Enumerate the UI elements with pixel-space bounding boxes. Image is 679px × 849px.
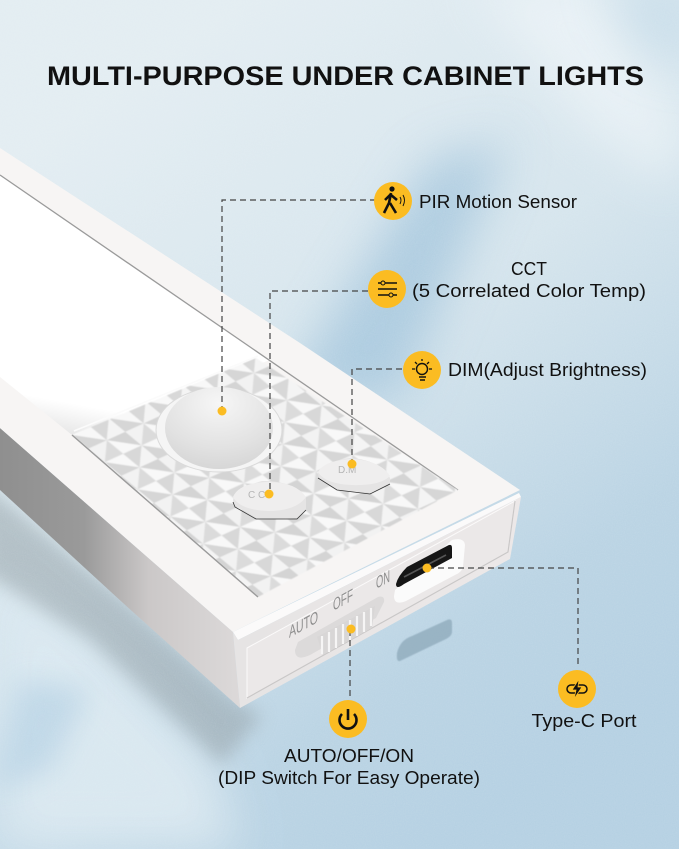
switch labels: OFF	[333, 584, 353, 615]
switch labels: ON	[376, 565, 390, 593]
callout: Type-C port	[532, 670, 636, 731]
side face	[0, 428, 240, 708]
DIP switch	[295, 597, 384, 658]
callout: CCT: CCT	[511, 259, 547, 279]
callout: CCT	[368, 259, 646, 308]
USB-C port	[394, 539, 465, 603]
title: MULTI-PURPOSE UNDER CABINET LIGHTS	[47, 61, 644, 91]
pattern module	[72, 356, 458, 597]
leader lines	[222, 200, 578, 700]
icon: power	[329, 700, 367, 738]
front face	[233, 497, 521, 708]
callout: AUTO/OFF/ON	[218, 700, 480, 788]
top frame	[0, 148, 520, 632]
icon: light bulb	[403, 351, 441, 389]
DIM button: D.M	[338, 465, 356, 476]
CCT button	[233, 481, 306, 520]
callout: DIM: DIM(Adjust Brightness)	[448, 360, 647, 380]
callout: PIR motion sensor: PIR Motion Sensor	[419, 192, 577, 212]
icon: walking person	[374, 182, 412, 220]
shadow under bar	[0, 480, 262, 765]
reflection of port	[397, 619, 452, 661]
icon: charging link	[558, 670, 596, 708]
PIR dome sensor	[156, 387, 282, 472]
CCT button: C C	[248, 490, 265, 501]
switch labels	[289, 565, 390, 642]
icon: sliders	[368, 270, 406, 308]
callout: PIR motion sensor	[374, 182, 577, 220]
callout: AUTO/OFF/ON: AUTO/OFF/ON	[284, 746, 414, 766]
DIM button	[318, 458, 390, 494]
switch labels: AUTO	[289, 606, 318, 642]
callout: DIM	[403, 351, 647, 389]
callout: CCT: (5 Correlated Color Temp)	[412, 281, 646, 301]
diffuser lens	[0, 175, 270, 435]
light bar product	[0, 148, 521, 708]
callout: AUTO/OFF/ON: (DIP Switch For Easy Operate)	[218, 768, 480, 788]
callout: Type-C port: Type-C Port	[532, 711, 636, 731]
anchor dots	[218, 406, 432, 634]
